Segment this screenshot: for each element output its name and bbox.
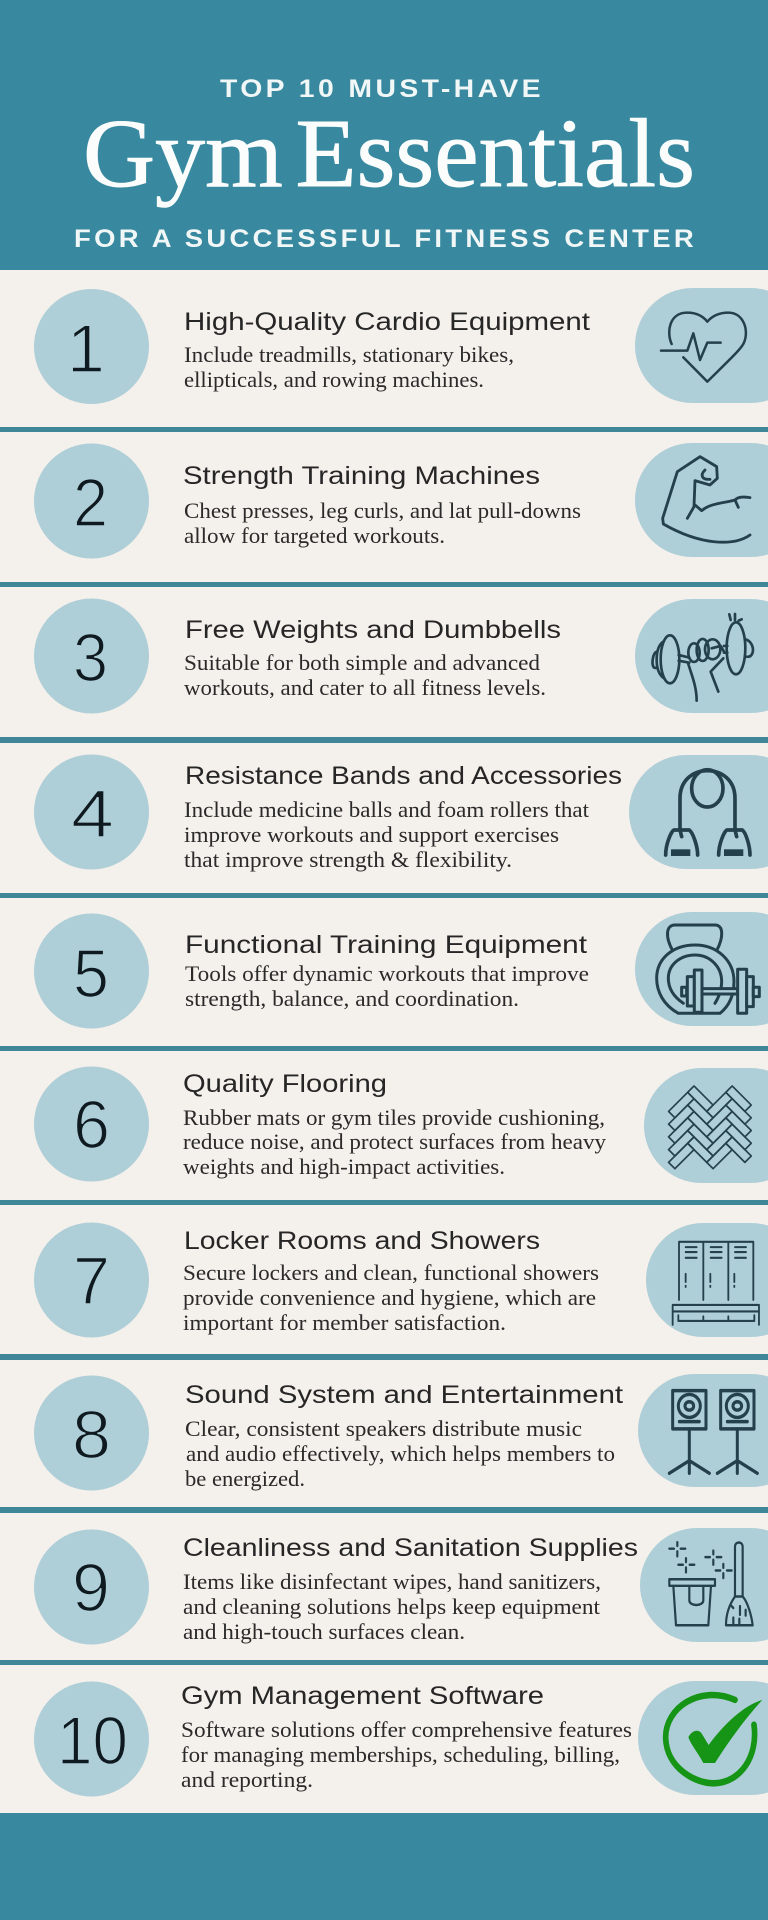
subheading: for a successful fitness center: FOR A SUCCESSFUL FITNESS CENTER: [74, 225, 697, 253]
text: flooring: [183, 1105, 606, 1179]
number badge 1: 1: [67, 311, 105, 387]
number badge 10: [34, 1682, 149, 1796]
text: strength: Chest presses, leg curls, and lat pull-downs: [184, 498, 581, 523]
heading: lockers: Locker Rooms and Showers: [184, 1227, 540, 1255]
text: cleanliness: [183, 1569, 601, 1644]
number badge 1: [34, 289, 149, 404]
text: software: Software solutions offer comprehensive features: [181, 1717, 632, 1742]
text: cleanliness: and cleaning solutions helps keep equipment: [183, 1594, 600, 1619]
number badge 8: [34, 1376, 149, 1490]
panel: 10 management software: [34, 1681, 768, 1796]
icon: heart with pulse: [635, 288, 768, 403]
number badge 3: 3: [73, 620, 108, 696]
heading: free weights: Free Weights and Dumbbells: [185, 616, 561, 644]
heading: sound system: Sound System and Entertainment: [185, 1381, 623, 1409]
text: cleanliness: and high-touch surfaces clean.: [183, 1619, 465, 1644]
text: functional training: strength, balance, and coordination.: [185, 986, 519, 1011]
icon: lockers with bench: [646, 1223, 768, 1337]
text: cardio: ellipticals, and rowing machines.: [184, 367, 484, 392]
number badge 7: [34, 1222, 149, 1338]
text: functional training: [185, 961, 589, 1011]
text: flooring: Rubber mats or gym tiles provide cushioning,: [183, 1105, 605, 1130]
text: lockers: important for member satisfaction.: [183, 1310, 506, 1335]
number badge 4: [34, 754, 149, 870]
text: flooring: reduce noise, and protect surfaces from heavy: [183, 1129, 606, 1154]
text: resistance bands: [184, 797, 589, 872]
icon: resistance band with handles: [629, 755, 768, 869]
number badge 2: [34, 444, 149, 558]
heading: software: Gym Management Software: [181, 1682, 544, 1710]
number badge 2: 2: [73, 465, 108, 541]
number badge 5: [34, 914, 149, 1028]
text: software: and reporting.: [181, 1767, 313, 1792]
text: lockers: [183, 1260, 599, 1335]
panel: 5 functional training: [34, 912, 768, 1028]
icon: bucket and broom: [640, 1528, 768, 1642]
icon: hand gripping dumbbell: [635, 599, 768, 713]
number badge 7: 7: [73, 1243, 110, 1319]
number badge 8: 8: [72, 1397, 111, 1473]
text: sound system: and audio effectively, which helps members to: [186, 1441, 615, 1466]
text: resistance bands: improve workouts and support exercises: [184, 822, 559, 847]
text: cleanliness: Items like disinfectant wipes, hand sanitizers,: [183, 1569, 601, 1594]
number badge 3: [34, 598, 149, 714]
number badge 6: 6: [73, 1087, 110, 1163]
heading: resistance bands: Resistance Bands and Accessories: [185, 762, 622, 790]
panel: 4 resistance bands: [34, 754, 768, 872]
text: software: for managing memberships, scheduling, billing,: [181, 1742, 620, 1767]
heading: functional training: Functional Training Equipment: [185, 931, 587, 959]
text: functional training: Tools offer dynamic workouts that improve: [185, 961, 589, 986]
number badge 5: 5: [73, 936, 109, 1012]
panel: 8 sound system: [34, 1374, 768, 1491]
text: cardio: [184, 342, 514, 392]
number badge 6: [34, 1066, 149, 1182]
icon: green check mark: [638, 1681, 768, 1795]
text: free weights: workouts, and cater to all fitness levels.: [184, 675, 546, 700]
text: resistance bands: Include medicine balls and foam rollers that: [184, 797, 589, 822]
text: lockers: provide convenience and hygiene, which are: [183, 1285, 596, 1310]
heading: cleanliness: Cleanliness and Sanitation Supplies: [183, 1534, 638, 1562]
icon: herringbone floor tiles: [644, 1068, 768, 1183]
number badge 9: [34, 1530, 149, 1644]
text: lockers: Secure lockers and clean, functional showers: [183, 1260, 599, 1285]
panel: 3 free weights: [34, 598, 768, 714]
panel: 2 strength machines: [34, 443, 768, 558]
text: sound system: [185, 1416, 615, 1491]
text: sound system: Clear, consistent speakers distribute music: [185, 1416, 582, 1441]
text: cardio: Include treadmills, stationary bikes,: [184, 342, 514, 367]
text: strength: allow for targeted workouts.: [184, 523, 445, 548]
text: free weights: Suitable for both simple and advanced: [184, 650, 540, 675]
heading: cardio: High-Quality Cardio Equipment: [184, 308, 590, 336]
icon: kettlebell and dumbbell: [635, 912, 768, 1026]
text: resistance bands: that improve strength & flexibility.: [184, 847, 512, 872]
heading: top 10 must-have: TOP 10 MUST-HAVE: [220, 75, 544, 103]
panel: 1 cardio equipment: [34, 288, 768, 404]
icon: flexed arm: [635, 443, 768, 557]
text: software: [181, 1717, 632, 1792]
panel: 6 quality flooring: [34, 1066, 768, 1183]
number badge 10: 10: [57, 1703, 128, 1779]
heading: strength: Strength Training Machines: [183, 462, 540, 490]
text: sound system: be energized.: [185, 1466, 305, 1491]
text: flooring: weights and high-impact activities.: [183, 1154, 505, 1179]
title: gym essentials: Gym Essentials: [83, 100, 695, 208]
number badge 4: 4: [71, 776, 114, 852]
number badge 9: 9: [72, 1550, 110, 1626]
text: strength: [184, 498, 581, 548]
panel: 7 locker rooms: [34, 1222, 768, 1338]
panel: 9 cleanliness: [34, 1528, 768, 1644]
icon: speakers on stands: [638, 1374, 768, 1487]
header band: [0, 0, 768, 270]
heading: flooring: Quality Flooring: [183, 1070, 387, 1098]
text: free weights: [184, 650, 546, 700]
footer band: [0, 1813, 768, 1920]
